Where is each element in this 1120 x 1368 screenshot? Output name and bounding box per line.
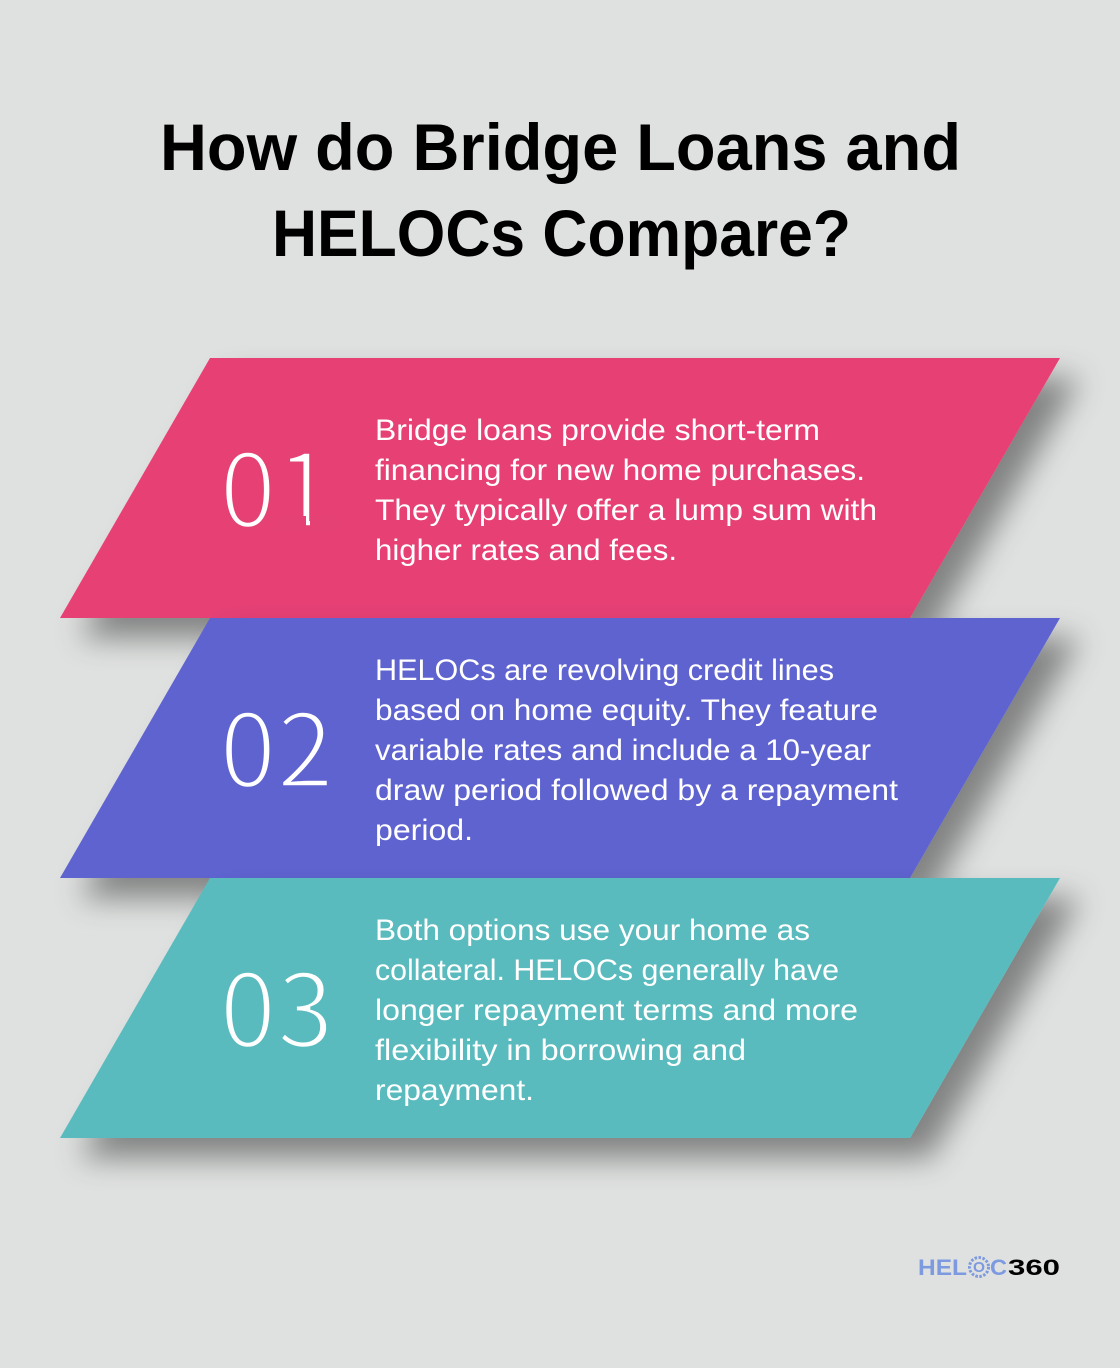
text block: both options bbox=[375, 914, 858, 1107]
panel: 03 both options bbox=[60, 878, 1060, 1138]
text block: both options: flexibility in borrowing and bbox=[375, 1034, 746, 1067]
icon: swirl O bbox=[970, 1258, 988, 1276]
teal parallelogram bbox=[60, 878, 1060, 1138]
text block: HELOCs: variable rates and include a 10-year bbox=[375, 734, 871, 767]
title: How do Bridge Loans and bbox=[160, 110, 961, 184]
logo: HELOC360: C bbox=[990, 1255, 1007, 1280]
pink parallelogram bbox=[60, 358, 1060, 618]
title: HELOCs Compare? bbox=[272, 196, 851, 270]
text block: bridge loans: They typically offer a lump sum with bbox=[375, 494, 877, 527]
text block: both options: repayment. bbox=[375, 1074, 534, 1107]
number 03: 03 bbox=[220, 930, 334, 1077]
text block: both options: Both options use your home as bbox=[375, 914, 810, 947]
logo: HELOC360: 360 bbox=[1008, 1255, 1060, 1280]
title bbox=[160, 110, 961, 270]
logo: HELOC360: HEL bbox=[918, 1255, 967, 1280]
text block: HELOCs bbox=[375, 654, 899, 847]
text block: bridge loans: financing for new home purchases. bbox=[375, 454, 865, 487]
text block: both options: longer repayment terms and more bbox=[375, 994, 858, 1027]
logo: HELOC360 bbox=[918, 1255, 1060, 1280]
panel: 02 HELOCs bbox=[60, 618, 1060, 878]
text block: bridge loans: Bridge loans provide short-term bbox=[375, 414, 820, 447]
text block: HELOCs: draw period followed by a repayment bbox=[375, 774, 899, 807]
number 02: 02 bbox=[220, 670, 334, 817]
icon: swirl O: O bbox=[973, 1259, 985, 1276]
number 01: 01 bbox=[220, 410, 333, 557]
text block: HELOCs: period. bbox=[375, 814, 473, 847]
text block: HELOCs: based on home equity. They feature bbox=[375, 694, 878, 727]
text block: both options: collateral. HELOCs generally have bbox=[375, 954, 839, 987]
text block: bridge loans: higher rates and fees. bbox=[375, 534, 677, 567]
text block: HELOCs: HELOCs are revolving credit lines bbox=[375, 654, 834, 687]
blue parallelogram bbox=[60, 618, 1060, 878]
text block: bridge loans bbox=[375, 414, 877, 567]
panel: 01 bridge loans bbox=[60, 358, 1060, 618]
